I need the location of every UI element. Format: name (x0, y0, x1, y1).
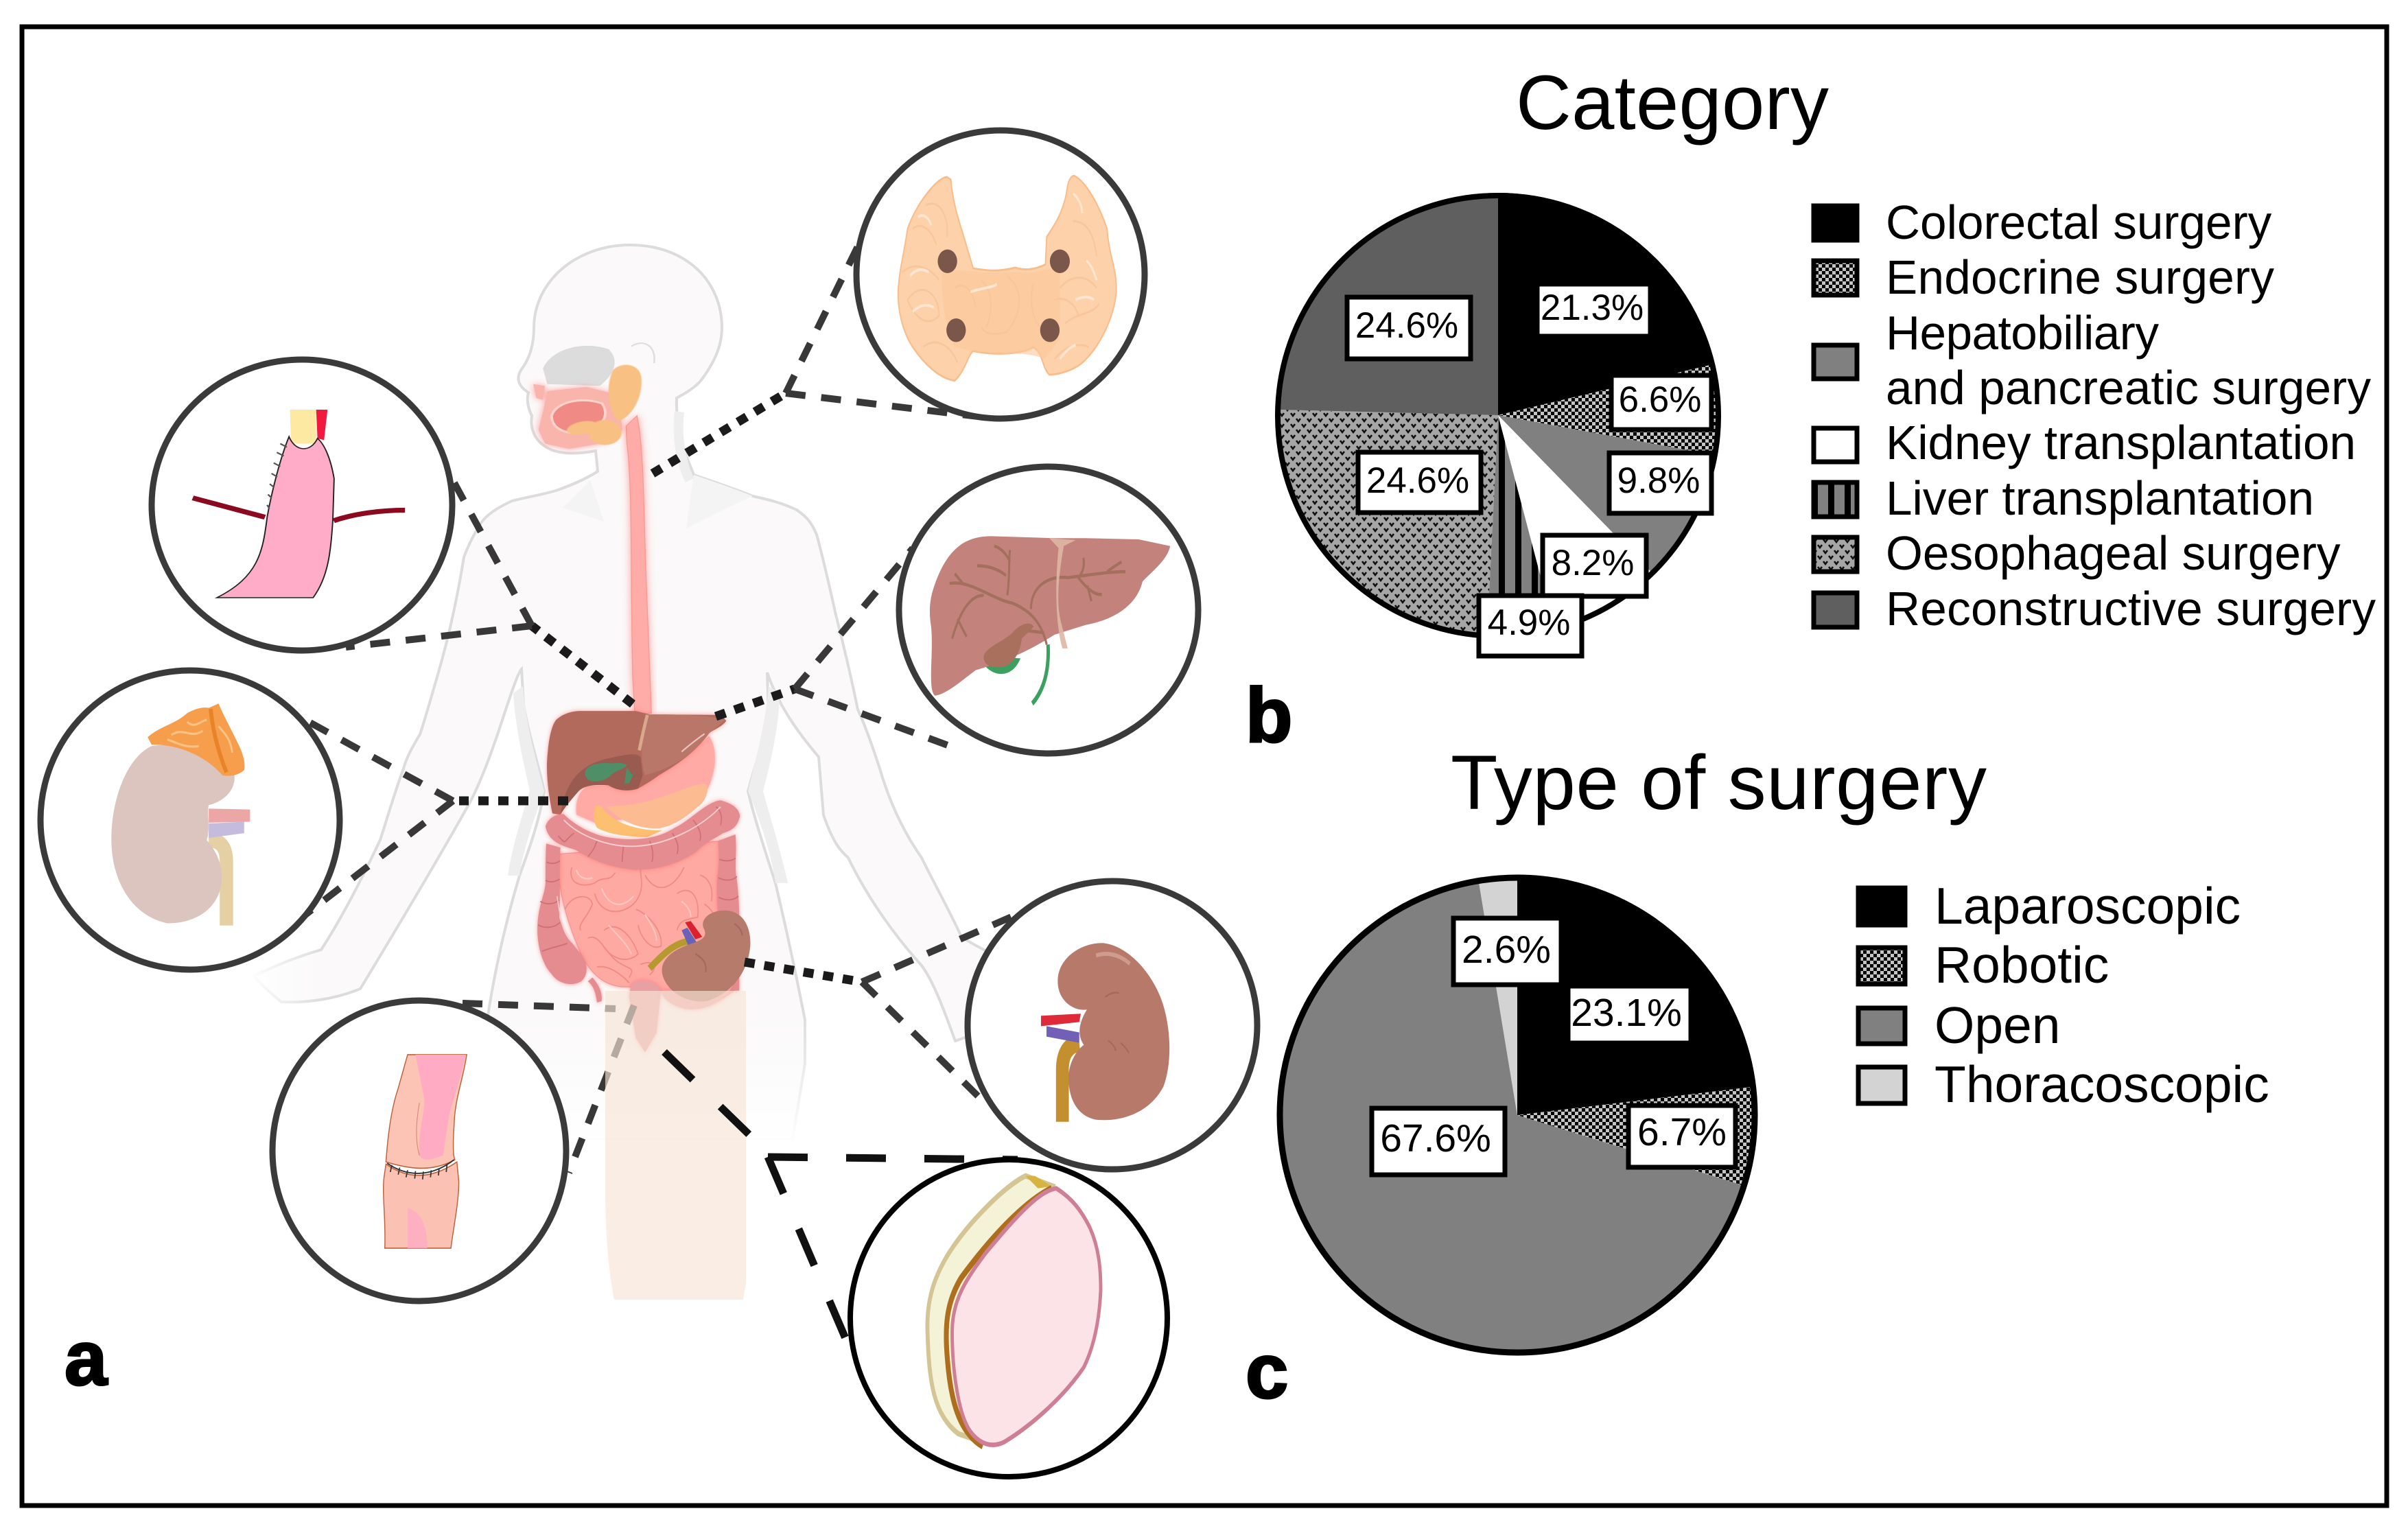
legend item hepatobiliary: Hepatobiliary (1886, 306, 2159, 360)
legend item endocrine: Endocrine surgery (1886, 250, 2274, 304)
label 9.8%: 9.8% (1617, 460, 1700, 501)
pancreas (606, 784, 708, 828)
label 23.1% (1568, 986, 1691, 1043)
label 67.6%: 67.6% (1380, 1116, 1491, 1160)
pie chart: type of surgery (1277, 875, 1757, 1355)
legend item kidney transplantation: Kidney transplantation (1886, 416, 2356, 469)
small intestine (558, 841, 736, 1005)
label 2.6%: 2.6% (1462, 928, 1551, 972)
human body silhouette (254, 245, 1035, 1139)
pie chart: category (1276, 193, 1720, 656)
label 8.2% (1543, 535, 1646, 596)
legend: type of surgery (1858, 877, 2269, 1113)
label 4.9% (1479, 596, 1582, 656)
stomach (576, 736, 715, 823)
connector: oesophagus callout (346, 480, 633, 704)
label 21.3%: 21.3% (1541, 288, 1644, 328)
callout: skin flap (850, 1160, 1167, 1477)
legend item oesophageal: Oesophageal surgery (1886, 526, 2341, 580)
legend item liver transplantation: Liver transplantation (1886, 471, 2314, 525)
panel a: body illustration with organ callouts (40, 130, 1257, 1477)
nasal cavity (543, 346, 615, 386)
organs: abdomen (537, 711, 750, 1053)
liver (547, 711, 726, 815)
label 9.8% (1609, 453, 1711, 513)
connector: bowel callout (463, 1003, 634, 1173)
transplanted kidney (650, 911, 750, 1001)
fade of lower torso (474, 1009, 830, 1146)
callout: adrenal gland on kidney (40, 670, 340, 970)
mouth and tongue (533, 384, 622, 449)
label 4.9%: 4.9% (1488, 602, 1570, 643)
legend item robotic (1858, 936, 2109, 994)
oesophagus (626, 416, 651, 713)
legend item reconstructive: Reconstructive surgery (1886, 582, 2376, 635)
label 6.7%: 6.7% (1637, 1110, 1727, 1154)
panel label a: a (65, 1315, 108, 1401)
connector: flap callout (664, 1052, 1018, 1366)
connector: adrenal kidney callout (301, 718, 568, 915)
heading: Category: Category (1516, 60, 1829, 145)
label 6.6% (1611, 375, 1711, 430)
callout: oesophageal reconstruction (152, 360, 452, 651)
connector: thyroid callout (653, 241, 995, 473)
fade of left hand (240, 947, 323, 1012)
legend item colorectal: Colorectal surgery (1886, 196, 2272, 249)
panel label c: c (1246, 1329, 1288, 1414)
label 67.6% (1372, 1108, 1505, 1175)
legend: category (1814, 196, 2376, 635)
legend item open: Open (1934, 996, 2060, 1054)
connector: kidney callout (745, 910, 1027, 1102)
heading: Type of surgery: Type of surgery (1451, 740, 1987, 826)
salivary glands (565, 365, 642, 445)
label 6.7% (1628, 1105, 1735, 1167)
rectum (629, 981, 661, 1053)
legend item laparoscopic: Laparoscopic (1934, 877, 2241, 935)
panel label b: b (1246, 672, 1292, 758)
label 6.6%: 6.6% (1619, 379, 1701, 420)
legend item hepatobiliary (1814, 306, 2371, 414)
legend item robotic: Robotic (1934, 936, 2109, 994)
label 2.6% (1453, 918, 1561, 985)
legend item hepatobiliary: and pancreatic surgery (1886, 361, 2371, 414)
callout: bowel anastomosis (272, 1000, 566, 1301)
label 8.2%: 8.2% (1552, 543, 1634, 583)
legend item open (1858, 996, 2060, 1054)
gallbladder (585, 763, 638, 783)
label 24.6% oesophageal (1358, 452, 1481, 513)
label 24.6% reconstructive (1347, 297, 1471, 359)
connector: liver callout (716, 548, 955, 748)
legend item thoracoscopic: Thoracoscopic (1934, 1055, 2269, 1113)
callout: liver (899, 467, 1198, 753)
callout: kidney graft (968, 881, 1257, 1169)
callout: thyroid (856, 130, 1145, 419)
label 24.6% reconstructive: 24.6% (1355, 305, 1458, 346)
label 23.1%: 23.1% (1571, 991, 1682, 1035)
label 24.6% oesophageal: 24.6% (1366, 460, 1469, 501)
pelvis and legs overlay (605, 991, 746, 1300)
organs: head and oesophagus (533, 343, 655, 713)
large intestine (537, 800, 740, 1003)
